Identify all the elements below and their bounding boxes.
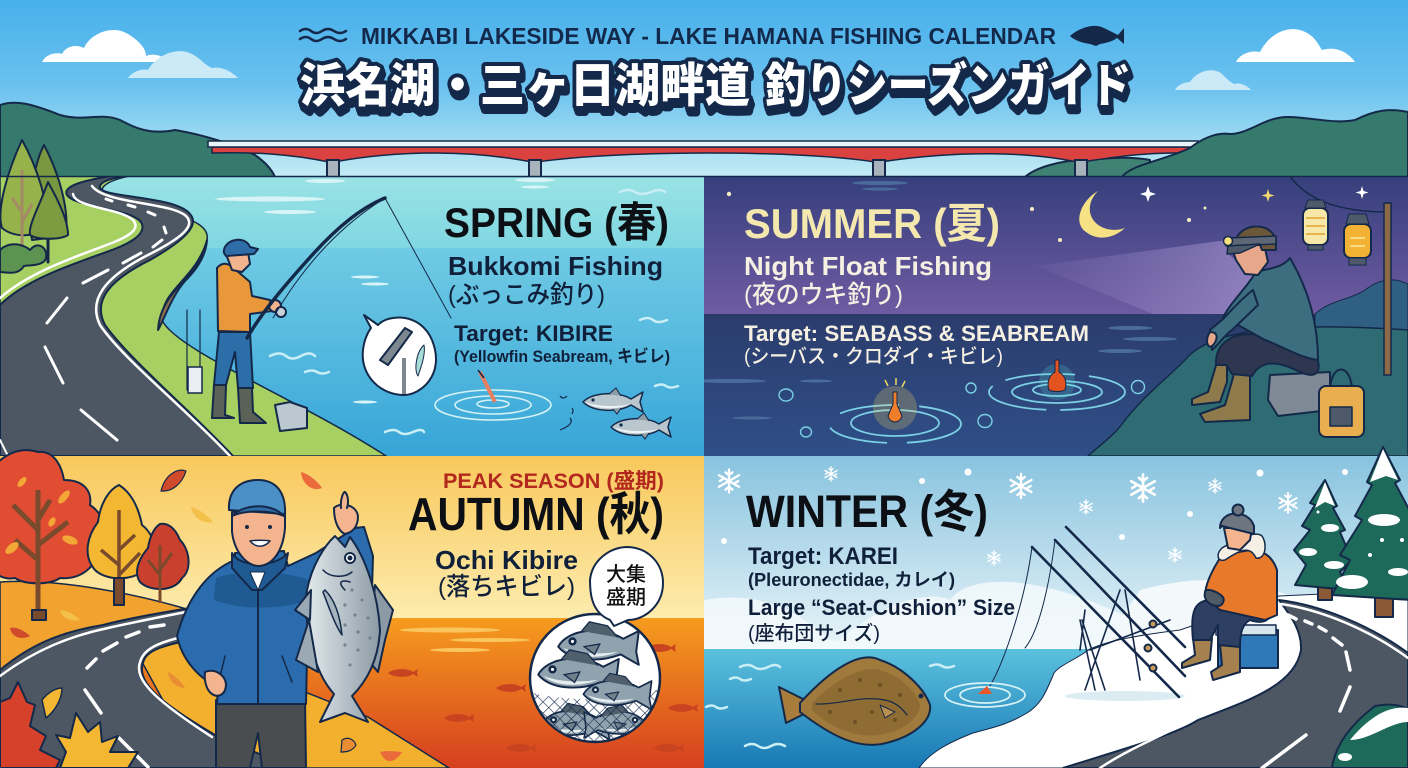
trees: spring <box>0 140 68 273</box>
bush <box>1332 705 1408 768</box>
red fish shadows <box>388 644 698 752</box>
shore <box>143 644 450 768</box>
text: summer: Night Float Fishing <box>744 251 992 281</box>
lanterns <box>1303 200 1371 265</box>
tree: big red <box>0 450 105 620</box>
jacket <box>177 527 373 704</box>
text: spring: SPRING (春) <box>444 199 669 246</box>
icon: cooler <box>275 402 307 431</box>
flounder <box>779 657 930 745</box>
icon: waves <box>300 29 346 41</box>
subtitle: MIKKABI LAKESIDE WAY - LAKE HAMANA FISHING CALENDAR <box>361 23 1056 49</box>
text: summer: Target: SEABASS & SEABREAM <box>744 321 1089 346</box>
ripples with float <box>435 370 551 420</box>
bank edge <box>158 240 207 330</box>
cloud upper right <box>1236 29 1355 62</box>
maple leaves <box>0 682 138 768</box>
face <box>232 510 285 566</box>
text: summer: (シーバス・クロダイ・キビレ) <box>744 345 1003 368</box>
text: autumn: PEAK SEASON (盛期) <box>443 470 664 493</box>
stars <box>727 186 1368 242</box>
person: summer <box>1192 226 1319 422</box>
person: winter <box>1182 504 1278 680</box>
float 2 with ripples <box>989 360 1125 410</box>
text: spring: Target: KIBIRE <box>454 321 613 346</box>
text: autumn: (落ちキビレ) <box>438 573 575 601</box>
back hill right <box>1025 158 1150 177</box>
big fish <box>368 585 393 672</box>
trousers <box>216 700 306 768</box>
text: spring: Bukkomi Fishing <box>448 251 663 281</box>
hand on hip <box>205 671 226 696</box>
falling leaves <box>10 470 402 761</box>
tree: small red <box>137 524 189 603</box>
main title <box>300 59 1131 112</box>
text: winter: (Pleuronectidae, カレイ) <box>748 570 955 590</box>
road <box>0 608 261 768</box>
cloud lower left <box>128 51 238 78</box>
main title: 浜名湖・三ヶ日湖畔道 <box>300 59 750 112</box>
panel: autumn <box>0 450 704 768</box>
shore <box>1088 327 1408 456</box>
text: autumn: AUTUMN (秋) <box>408 488 664 540</box>
wire <box>1290 176 1388 212</box>
distant hill <box>1314 279 1408 330</box>
bucket <box>1319 370 1364 437</box>
box <box>1268 372 1330 416</box>
text: winter: Target: KAREI <box>748 543 898 570</box>
distant snow hills <box>704 582 1123 649</box>
road <box>1063 600 1408 768</box>
bridge <box>208 141 1198 177</box>
pine small <box>1294 480 1352 600</box>
callout: speech bubble: 盛期 <box>606 586 646 609</box>
road center dashes <box>45 199 166 440</box>
snow ground shadows <box>1065 691 1185 701</box>
pine big <box>1332 447 1408 617</box>
panel: winter <box>704 447 1408 768</box>
float 1 with ripples <box>829 378 961 443</box>
callout: speech bubble: 大集 <box>606 563 646 586</box>
callout: speech bubble <box>590 547 663 626</box>
callout: net of fish <box>530 614 662 745</box>
text: spring: (ぶっこみ釣り) <box>448 281 605 309</box>
text: spring <box>444 199 670 366</box>
text: summer <box>744 200 1089 368</box>
panel: spring <box>0 140 704 456</box>
text: spring: (Yellowfin Seabream, キビレ) <box>454 346 670 366</box>
icon: fish silhouette <box>1070 26 1124 46</box>
reflections on water <box>400 628 530 652</box>
panel: sky header <box>0 0 1408 178</box>
grass <box>0 176 386 456</box>
fish pair <box>560 388 671 439</box>
road edge lines <box>0 186 230 456</box>
float ripple <box>945 683 1025 707</box>
cloud upper left <box>42 30 170 62</box>
text: summer: SUMMER (夏) <box>744 200 1000 247</box>
left hill <box>0 103 275 177</box>
snowflakes <box>719 467 1348 565</box>
hill <box>0 580 186 669</box>
tree: yellow <box>88 485 154 605</box>
text: summer: (夜のウキ釣り) <box>744 281 903 309</box>
panel: summer <box>694 176 1408 456</box>
water ripples <box>215 178 555 404</box>
cloud lower right <box>1175 70 1251 90</box>
text: winter: Large “Seat-Cushion” Size <box>748 595 1015 620</box>
callout: rod rest <box>363 315 436 395</box>
text: winter: (座布団サイズ) <box>748 622 880 645</box>
text: autumn: Ochi Kibire <box>435 545 578 575</box>
man holding fish <box>177 480 393 768</box>
hand up and hook <box>334 505 358 534</box>
rods <box>990 527 1185 697</box>
text: winter: WINTER (冬) <box>746 486 988 537</box>
text: autumn <box>408 470 664 601</box>
angler: spring <box>187 198 451 423</box>
road <box>0 176 233 456</box>
front hill right <box>1122 110 1408 177</box>
bubbles <box>779 380 1144 437</box>
snow bank <box>919 590 1408 768</box>
waves <box>706 664 954 748</box>
beam of headlamp <box>1056 240 1252 314</box>
main title: 釣りシーズンガイド <box>765 59 1131 112</box>
pole <box>1384 203 1391 375</box>
moon <box>1079 191 1125 238</box>
text: winter <box>746 486 1015 645</box>
